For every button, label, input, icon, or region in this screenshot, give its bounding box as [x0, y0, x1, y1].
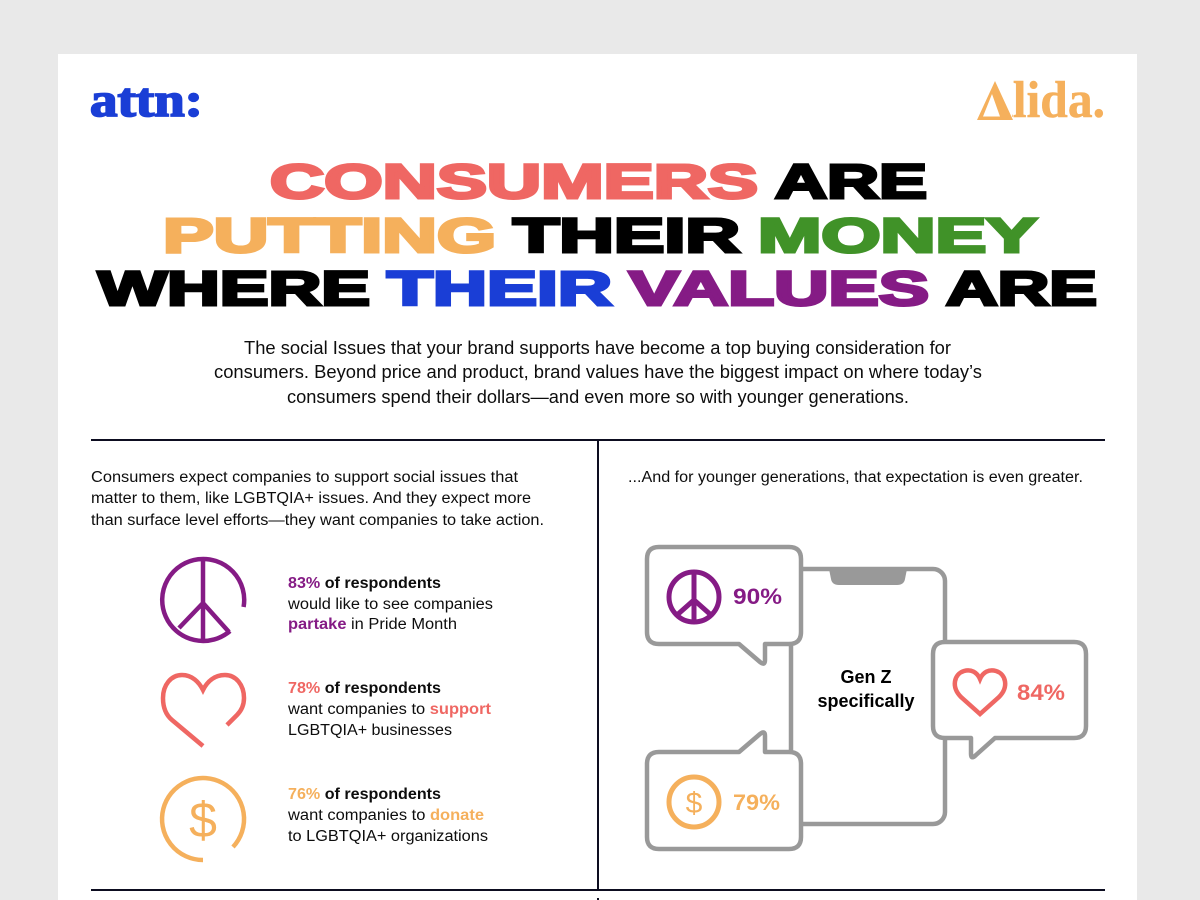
title: CONSUMERS — [270, 155, 758, 209]
intro paragraph: consumers spend their dollars—and even more so with younger generations. — [287, 387, 909, 407]
stat: 76 percent — [287, 786, 488, 845]
stat: 83 percent — [287, 575, 493, 633]
left column intro text: Consumers expect companies to support social issues that — [91, 469, 519, 486]
intro paragraph — [214, 338, 982, 407]
title: PUTTING — [163, 209, 496, 263]
stat: 78 percent: 78% of respondents — [288, 680, 441, 697]
stat: 83 percent: 83% of respondents — [288, 575, 441, 592]
stat: 78 percent: want companies to support — [287, 701, 491, 718]
title: MONEY — [758, 209, 1037, 263]
title: VALUES — [629, 262, 929, 316]
stat: 78 percent: LGBTQIA+ businesses — [288, 722, 452, 739]
bubble: 79 percent: 79% — [733, 790, 780, 815]
bubble: 79 percent — [647, 732, 801, 849]
left column intro text: matter to them, like LGBTQIA+ issues. And they expect more — [91, 490, 531, 507]
title: THEIR — [387, 262, 612, 316]
stat: 76 percent: 76% of respondents — [288, 786, 441, 803]
phone body — [791, 569, 945, 824]
title: THEIR — [513, 209, 740, 263]
icon: dollar coin — [162, 778, 244, 860]
bubble: 84 percent: 84% — [1017, 680, 1065, 705]
logo: Alida: Alida. — [977, 72, 1105, 129]
intro paragraph: The social Issues that your brand supports have become a top buying consideration for — [244, 338, 951, 358]
icon: peace sign — [162, 558, 244, 641]
phone diagram — [647, 547, 1086, 849]
stat: 83 percent: would like to see companies — [287, 596, 493, 613]
bubble: 84 percent — [933, 642, 1086, 757]
right column intro text: ...And for younger generations, that expectation is even greater. — [628, 469, 1083, 486]
left column intro text: than surface level efforts—they want companies to take action. — [91, 512, 544, 529]
logo: attn: attn: — [90, 74, 203, 127]
gen z label: Gen Z — [840, 667, 892, 687]
title — [98, 155, 1097, 316]
stat: 76 percent: want companies to donate — [287, 807, 484, 824]
left column intro text — [91, 469, 544, 529]
gen z label: specifically — [817, 691, 915, 711]
intro paragraph: consumers. Beyond price and product, brand values have the biggest impact on where today’s — [214, 362, 982, 382]
stat: 83 percent: partake in Pride Month — [288, 616, 457, 633]
phone notch — [829, 569, 907, 585]
title: ARE — [775, 155, 927, 209]
icon: heart — [163, 675, 244, 746]
title: ARE — [946, 262, 1097, 316]
title: WHERE — [98, 262, 370, 316]
bubble: 90 percent — [647, 547, 801, 664]
icon: dollar coin: $ — [189, 792, 217, 848]
bubble: 79 percent: $ — [686, 787, 703, 820]
stat: 76 percent: to LGBTQIA+ organizations — [288, 828, 488, 845]
stat: 78 percent — [287, 680, 491, 739]
bubble: 90 percent: 90% — [733, 584, 782, 609]
